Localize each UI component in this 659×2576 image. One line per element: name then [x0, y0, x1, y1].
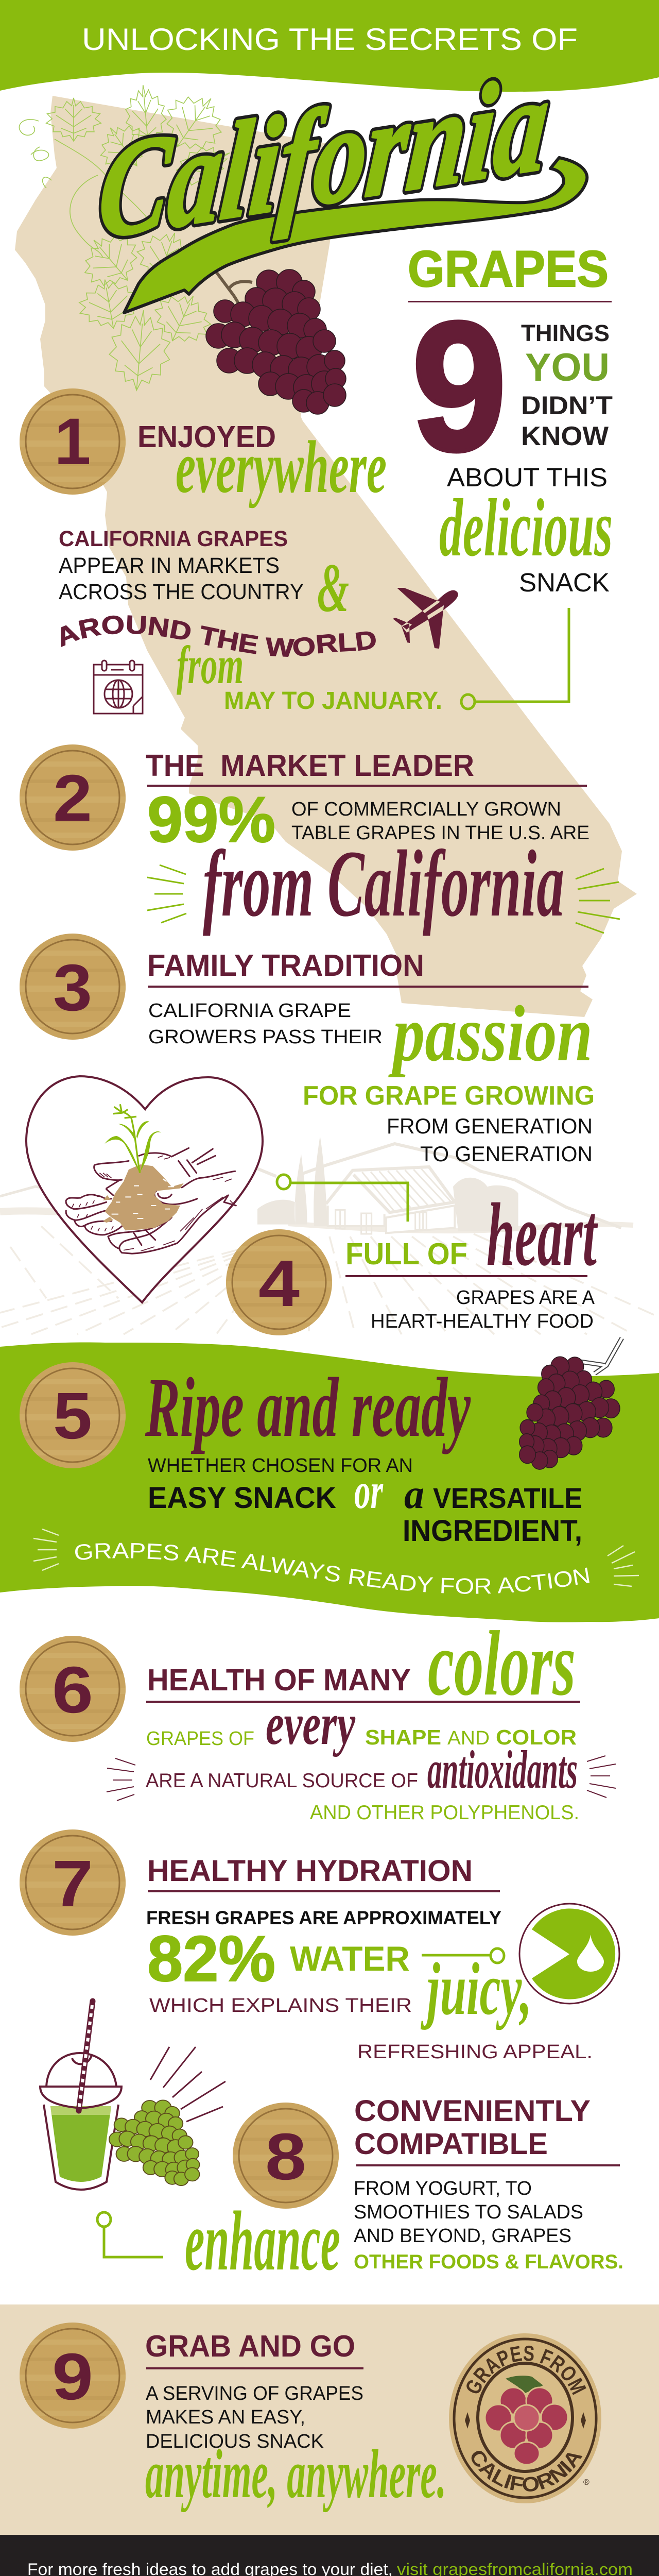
- registered mark: ®: [583, 2478, 589, 2487]
- connector: [97, 2212, 163, 2257]
- across the country: ACROSS THE COUNTRY: [59, 580, 304, 604]
- compatible: COMPATIBLE: [354, 2127, 548, 2161]
- logo leaf: [506, 2376, 543, 2393]
- know: KNOW: [521, 421, 609, 451]
- seedling: [105, 1104, 161, 1173]
- and: AND: [447, 1727, 490, 1749]
- conveniently: CONVENIENTLY: [354, 2094, 591, 2128]
- about this: ABOUT THIS: [447, 463, 608, 492]
- versatile: VERSATILE: [433, 1482, 582, 1514]
- icon: stem: [580, 1338, 622, 1374]
- grapes are always ready: GRAPES ARE ALWAYS READY FOR ACTION: [75, 1543, 589, 1594]
- may to january: MAY TO JANUARY.: [224, 687, 442, 715]
- connector: [422, 1948, 504, 1963]
- whether chosen: WHETHER CHOSEN FOR AN: [148, 1455, 413, 1477]
- from yogurt: FROM YOGURT, TO: [354, 2178, 532, 2199]
- grapes are a: GRAPES ARE A: [456, 1287, 595, 1309]
- for grape growing: FOR GRAPE GROWING: [303, 1081, 595, 1111]
- medallion 9: 9: [52, 2340, 93, 2414]
- icon: grape stem: [216, 272, 252, 309]
- band background: [0, 1342, 659, 1622]
- heading: HEALTHY HYDRATION: [147, 1854, 473, 1888]
- juicy: juicy,: [421, 1948, 532, 2030]
- passion: passion: [388, 989, 593, 1078]
- every: every: [266, 1691, 356, 1757]
- panel: fact 8: [97, 2094, 623, 2288]
- straw: [79, 2001, 93, 2111]
- sparkles: [107, 1756, 616, 1801]
- medallion 5: [20, 1362, 126, 1468]
- medallion 2: [20, 744, 126, 851]
- medallion 2: 2: [53, 761, 92, 835]
- a: a: [404, 1472, 424, 1517]
- snack: SNACK: [519, 568, 610, 597]
- smoothie illustration: [40, 2001, 226, 2190]
- big number 9: 9: [412, 284, 507, 489]
- logo diamonds: [465, 2412, 586, 2429]
- icon: calendar: [94, 660, 143, 714]
- medallion 4: [226, 1229, 332, 1335]
- from: from: [177, 635, 244, 695]
- medallion 8: [233, 2103, 339, 2209]
- a serving of grapes: A SERVING OF GRAPES: [146, 2383, 363, 2404]
- soil flecks: [112, 1179, 174, 1218]
- full of: FULL OF: [345, 1237, 467, 1271]
- heading: ENJOYED: [137, 420, 276, 454]
- sparkles: [147, 865, 620, 933]
- fresh grapes: FRESH GRAPES ARE APPROXIMATELY: [146, 1907, 501, 1928]
- panel: fact 3: [20, 934, 595, 1111]
- connector to fact 4: [277, 1175, 408, 1222]
- soil: [103, 1164, 184, 1230]
- smoothie liquid: [50, 2106, 111, 2182]
- medallion 4: 4: [258, 1247, 300, 1320]
- logo swoosh: [124, 158, 587, 313]
- sparkles: [33, 1529, 639, 1586]
- to generation: TO GENERATION: [420, 1142, 593, 1166]
- medallion 7: 7: [52, 1847, 93, 1921]
- icon: purple grape bunch: [206, 269, 346, 414]
- medallion 9: [20, 2323, 126, 2429]
- icon: plane: [393, 588, 458, 649]
- of commercially grown: OF COMMERCIALLY GROWN: [291, 799, 561, 820]
- grapes heading: GRAPES: [408, 240, 609, 297]
- left hills: [0, 1187, 165, 1216]
- medallion 6: 6: [52, 1653, 93, 1727]
- grapes of: GRAPES OF: [146, 1728, 254, 1750]
- connector to may to january: [461, 608, 569, 709]
- and beyond: AND BEYOND, GRAPES: [354, 2225, 571, 2247]
- from generation: FROM GENERATION: [387, 1114, 593, 1138]
- panel: fact 9: [0, 2304, 659, 2535]
- grapes from california logo: [449, 2333, 601, 2503]
- you: YOU: [525, 346, 610, 389]
- heading: HEALTH OF MANY: [147, 1663, 411, 1697]
- medallion 1: 1: [54, 405, 91, 479]
- enhance: enhance: [185, 2194, 340, 2288]
- panel: fact 5 green band: [0, 1336, 659, 1622]
- heading: FAMILY TRADITION: [147, 948, 424, 982]
- medallion 8: 8: [265, 2120, 306, 2194]
- panel: fact 4: [226, 1184, 598, 1335]
- farm landscape: [0, 1136, 654, 1334]
- band background: [0, 2304, 659, 2535]
- icon: grape bunch: [519, 1357, 620, 1469]
- panel: fact 1: [20, 388, 458, 715]
- growers pass their: GROWERS PASS THEIR: [148, 1026, 383, 1048]
- medallion 5: 5: [53, 1379, 92, 1453]
- easy snack: EASY SNACK: [148, 1481, 336, 1515]
- california grape: CALIFORNIA GRAPE: [148, 1000, 351, 1022]
- rays: [150, 2047, 226, 2122]
- other foods: OTHER FOODS & FLAVORS.: [354, 2251, 623, 2273]
- heart-healthy food: HEART-HEALTHY FOOD: [371, 1311, 594, 1332]
- appear in markets: APPEAR IN MARKETS: [59, 553, 280, 578]
- footer: [0, 2535, 659, 2576]
- medallion 6: [20, 1636, 126, 1742]
- smoothies: SMOOTHIES TO SALADS: [354, 2201, 583, 2223]
- ampersand: &: [317, 550, 349, 626]
- refreshing appeal: REFRESHING APPEAL.: [357, 2041, 593, 2063]
- green grapes: [109, 2100, 199, 2185]
- polyphenols: AND OTHER POLYPHENOLS.: [310, 1802, 579, 1824]
- cup outline: [40, 2053, 122, 2190]
- are a natural source: ARE A NATURAL SOURCE OF: [146, 1770, 418, 1792]
- which explains: WHICH EXPLAINS THEIR: [149, 1995, 412, 2016]
- everywhere: everywhere: [176, 426, 387, 509]
- hands outline: [66, 1148, 236, 1253]
- table grapes: TABLE GRAPES IN THE U.S. ARE: [291, 822, 589, 844]
- shape: SHAPE: [365, 1725, 441, 1749]
- water pie chart: [519, 1904, 619, 2004]
- logo top text: GRAPES FROM: [466, 2345, 586, 2395]
- house and trees: [257, 1136, 621, 1234]
- colors: colors: [428, 1612, 576, 1715]
- hand hatching: [72, 1156, 233, 1251]
- ingredient: INGREDIENT,: [403, 1514, 582, 1548]
- ripe and ready: Ripe and ready: [145, 1360, 471, 1454]
- delicious snack: DELICIOUS SNACK: [146, 2431, 324, 2452]
- medallion 1: [20, 388, 126, 495]
- logo bottom text: CALIFORNIA: [472, 2451, 583, 2492]
- makes an easy: MAKES AN EASY,: [146, 2406, 305, 2428]
- 99 percent: 99%: [147, 784, 275, 856]
- around the world: AROUND THE WORLD: [61, 615, 376, 657]
- fields: [0, 1226, 654, 1334]
- medallion 7: [20, 1829, 126, 1936]
- hands and seedling: [66, 1104, 236, 1253]
- 82 percent: 82%: [147, 1923, 275, 1995]
- water: WATER: [290, 1939, 410, 1978]
- or: or: [354, 1462, 384, 1519]
- medallion 3: [20, 934, 126, 1040]
- map of California: [15, 96, 637, 1017]
- title: UNLOCKING THE SECRETS OF: [82, 22, 578, 57]
- header band: [0, 0, 659, 92]
- logo grapes: [485, 2387, 568, 2465]
- panel: generation text: [387, 1114, 593, 1166]
- vine illustration: [19, 82, 287, 393]
- California script logo: [93, 45, 587, 313]
- heading: GRAB AND GO: [145, 2329, 355, 2363]
- subtitle: 9 things: [408, 240, 613, 597]
- heart with hands illustration: [26, 1076, 263, 1302]
- heart outline: [26, 1076, 263, 1302]
- color: COLOR: [496, 1725, 577, 1749]
- didn't: DIDN’T: [521, 391, 613, 420]
- panel: fact 2: [20, 744, 620, 937]
- california grapes: CALIFORNIA GRAPES: [59, 527, 288, 551]
- panel: fact 6: [20, 1612, 616, 1824]
- heading: THE MARKET LEADER: [146, 749, 474, 783]
- panel: fact 7: [20, 1829, 619, 2063]
- medallion 3: 3: [53, 951, 92, 1025]
- things: THINGS: [521, 320, 610, 346]
